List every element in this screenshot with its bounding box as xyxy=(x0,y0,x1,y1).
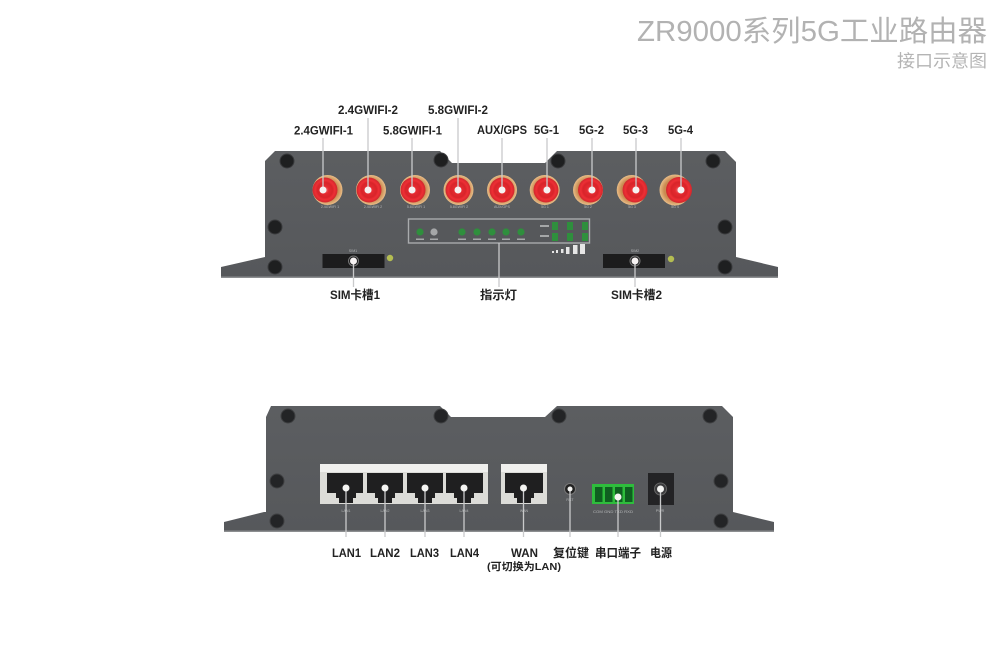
label: 5G-1: 5G-1 xyxy=(534,123,559,137)
subtitle: 接口示意图 xyxy=(897,51,987,71)
leader lines: front view xyxy=(323,118,681,287)
panel: rear view device xyxy=(224,406,774,532)
port labels: LAN block: LAN2 xyxy=(380,509,390,513)
SIM slot 1 LED xyxy=(387,255,393,261)
power jack: PWR xyxy=(656,509,665,513)
label: LAN2: LAN2 xyxy=(370,546,400,560)
serial terminal block xyxy=(592,484,634,514)
label: LAN1: LAN1 xyxy=(332,546,361,560)
label: 5.8GWIFI-2: 5.8GWIFI-2 xyxy=(428,103,488,117)
mounting screws: front xyxy=(268,153,732,274)
label: 可切换为LAN: (可切换为LAN) xyxy=(487,560,561,573)
antenna connector: 2.4GWIFI-2 xyxy=(356,175,386,209)
antenna connector: 5G-2 xyxy=(573,175,603,209)
antenna connector: 5.8GWIFI-1 xyxy=(400,175,430,209)
connector marker dots: front view xyxy=(320,186,684,264)
antenna connector: AUX/GPS xyxy=(487,175,517,209)
bottom edge highlight: front xyxy=(221,276,778,278)
port labels: LAN block: LAN1 xyxy=(342,509,350,513)
signal strength bars xyxy=(552,244,585,254)
port: LAN2 xyxy=(367,473,403,503)
label: 指示灯: 指示灯 xyxy=(480,287,517,302)
SIM slot 2 LED xyxy=(668,256,674,262)
power jack xyxy=(648,473,674,513)
label: 2.4GWIFI-1: 2.4GWIFI-1 xyxy=(294,124,353,138)
label: 5.8GWIFI-1: 5.8GWIFI-1 xyxy=(383,124,442,138)
panel: front view device xyxy=(221,151,778,278)
label: 5G-3: 5G-3 xyxy=(623,123,648,137)
connector marker dots: rear view xyxy=(342,484,664,500)
title: ZR9000系列5G工业路由器 xyxy=(637,15,987,48)
label: 2.4GWIFI-2: 2.4GWIFI-2 xyxy=(338,103,398,117)
bottom edge highlight: rear xyxy=(224,530,774,532)
antenna connector: 2.4GWIFI-2: 2.4GWIFI 2 xyxy=(364,205,382,209)
WAN port xyxy=(501,464,547,513)
antenna connector: 5G-2: 5G 2 xyxy=(584,205,592,209)
label: 5G-4: 5G-4 xyxy=(668,123,693,137)
antenna connector: 5G-1 xyxy=(530,175,560,209)
antenna connector: 5G-1: 5G 1 xyxy=(541,205,549,209)
SIM slot 2: SIM2 xyxy=(631,249,639,253)
label: SIM卡槽1: SIM卡槽1 xyxy=(330,287,380,302)
port labels: LAN block: LAN3 xyxy=(420,509,430,513)
port labels: LAN block: LAN4 xyxy=(460,509,468,513)
antenna connector: 5.8GWIFI-2: 5.8GWIFI 2 xyxy=(450,205,468,209)
antenna connector: AUX/GPS: AUX/GPS xyxy=(494,205,511,209)
labels: front view xyxy=(294,103,693,302)
antenna connector: 2.4GWIFI-1 xyxy=(312,175,342,209)
label: 电源: 电源 xyxy=(650,545,672,560)
SIM slot 2 xyxy=(603,249,665,268)
labels: rear view xyxy=(332,545,672,573)
label: SIM卡槽2: SIM卡槽2 xyxy=(611,287,662,302)
WAN port: WAN xyxy=(520,509,529,513)
port labels: LAN block xyxy=(342,509,468,513)
label: AUX/GPS: AUX/GPS xyxy=(477,123,527,137)
device body: rear xyxy=(224,406,774,532)
label: 5G-2: 5G-2 xyxy=(579,123,604,137)
antenna connector: 5.8GWIFI-1: 5.8GWIFI 1 xyxy=(407,205,425,209)
antenna connector: 5G-3 xyxy=(617,175,648,209)
label: 复位键: 复位键 xyxy=(553,545,589,560)
port: LAN3 xyxy=(407,473,443,503)
antenna connector: 5G-3: 5G 3 xyxy=(628,205,636,209)
indicator panel xyxy=(408,219,590,243)
label: 串口端子: 串口端子 xyxy=(595,545,641,560)
label: LAN4: LAN4 xyxy=(450,546,479,560)
reset button xyxy=(564,484,576,502)
mounting screws: rear xyxy=(270,409,728,528)
leader lines: rear view xyxy=(346,488,660,537)
label: LAN3: LAN3 xyxy=(410,546,439,560)
antenna connector: 5G-4 xyxy=(660,174,692,209)
port: LAN4 xyxy=(446,473,483,503)
antenna connector: 5G-4: 5G 4 xyxy=(671,205,679,209)
device body: front xyxy=(221,151,778,278)
serial terminal block: COM GND TXD RXD xyxy=(593,510,633,514)
LAN port block xyxy=(320,464,488,504)
SIM slot 1 xyxy=(322,249,384,268)
antenna connector: 2.4GWIFI-1: 2.4GWIFI 1 xyxy=(321,205,339,209)
SIM slot 1: SIM1 xyxy=(349,249,357,253)
antenna connector: 5.8GWIFI-2 xyxy=(444,175,474,209)
port: LAN1 xyxy=(327,473,363,503)
reset button: RST xyxy=(566,498,574,502)
label: WAN: WAN xyxy=(511,546,538,560)
